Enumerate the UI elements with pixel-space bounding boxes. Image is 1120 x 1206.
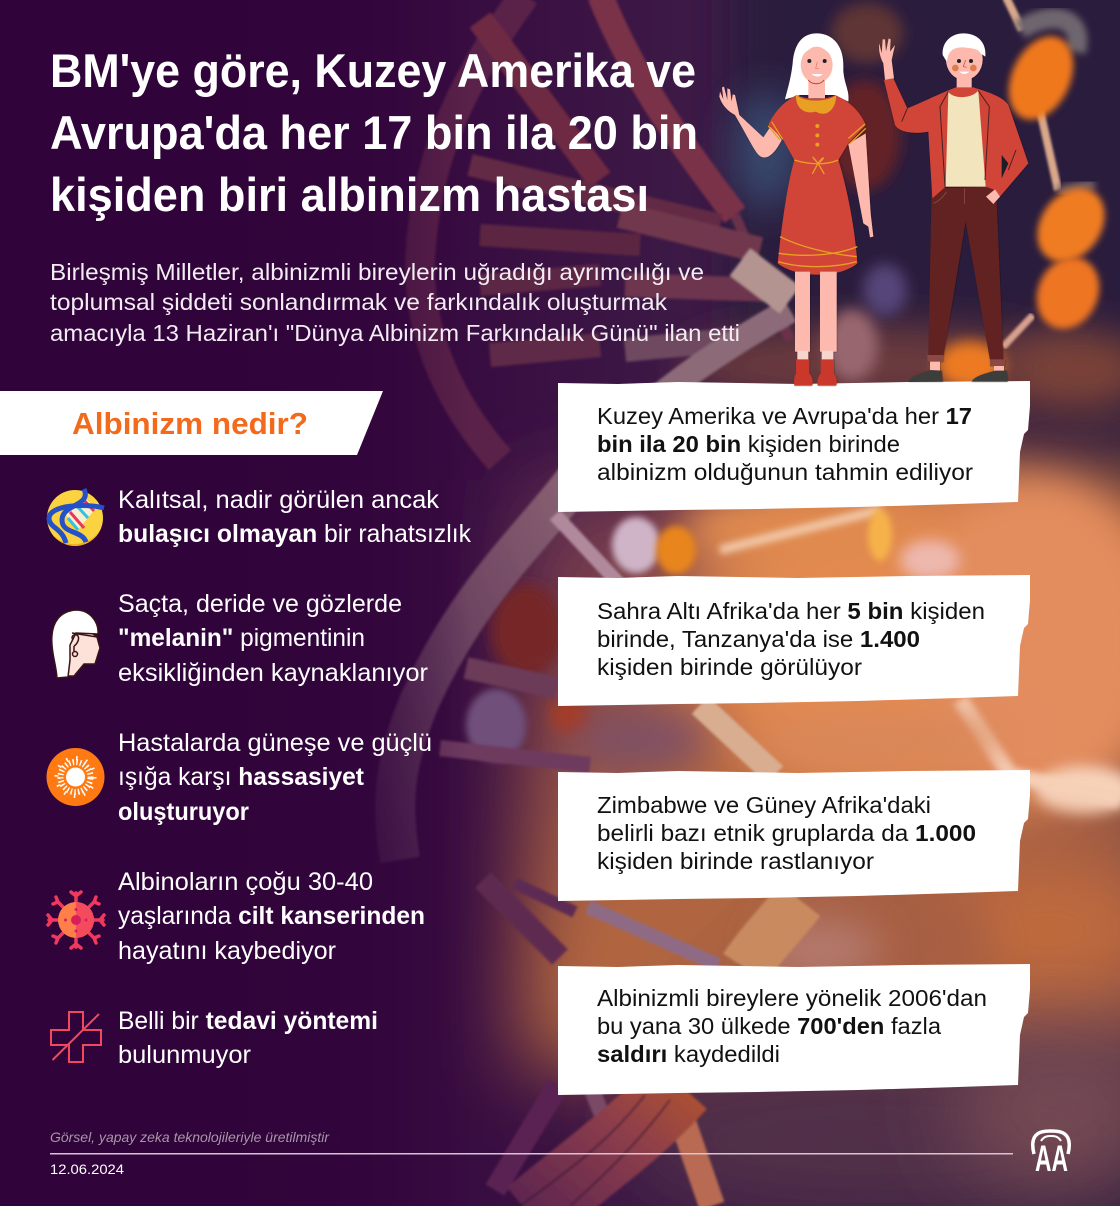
- card: Sub-Saharan Africa: Sahra Altı Afrika'da her 5 bin kişiden: [597, 598, 985, 624]
- list item: skin cancer: yaşlarında cilt kanserinden: [118, 902, 425, 930]
- icon: albino head profile: [52, 610, 100, 678]
- list item: skin cancer: hayatını kaybediyor: [118, 937, 336, 965]
- card: North America and Europe: [558, 381, 1030, 512]
- list item: hereditary: bulaşıcı olmayan bir rahatsızlık: [118, 520, 471, 548]
- list item: melanin: Saçta, deride ve gözlerde: [118, 590, 402, 618]
- icon: virus: [48, 892, 104, 948]
- illustration: albino woman and man: [719, 33, 1028, 386]
- title: kişiden biri albinizm hastası: [50, 168, 649, 221]
- list item: no treatment: [51, 1007, 378, 1069]
- subtitle text: amacıyla 13 Haziran'ı "Dünya Albinizm Farkındalık Günü" ilan etti: [50, 320, 740, 346]
- strands: [395, 0, 800, 1206]
- list item: melanin: [52, 590, 428, 687]
- title: Avrupa'da her 17 bin ila 20 bin: [50, 106, 698, 159]
- card: North America and Europe: bin ila 20 bin kişiden birinde: [597, 431, 900, 457]
- woman: [719, 33, 873, 386]
- subtitle text: toplumsal şiddeti sonlandırmak ve farkındalık oluşturmak: [50, 289, 668, 315]
- footer note: Görsel, yapay zeka teknolojileriyle üretilmiştir: [50, 1129, 330, 1145]
- list item: sun sensitivity: ışığa karşı hassasiyet: [118, 763, 365, 791]
- list item: no treatment: Belli bir tedavi yöntemi: [118, 1007, 378, 1035]
- card: Zimbabwe and South Africa: kişiden birinde rastlanıyor: [597, 848, 874, 874]
- subtitle text: [50, 259, 740, 346]
- card: attacks: Albinizmli bireylere yönelik 2006'dan: [597, 985, 987, 1011]
- icon: sun: [46, 748, 104, 806]
- card: attacks: [558, 964, 1030, 1095]
- card: Sub-Saharan Africa: [558, 575, 1030, 706]
- logo: AA: AA: [1035, 1138, 1068, 1179]
- man: [879, 33, 1028, 382]
- list item: hereditary: [47, 486, 471, 548]
- title: [50, 44, 698, 221]
- card: Zimbabwe and South Africa: Zimbabwe ve Güney Afrika'daki: [597, 792, 931, 818]
- heading banner: Albinizm nedir?: Albinizm nedir?: [72, 406, 308, 441]
- list item: sun sensitivity: [46, 729, 432, 826]
- list item: hereditary: Kalıtsal, nadir görülen ancak: [118, 486, 440, 514]
- card: attacks: saldırı kaydedildi: [597, 1041, 780, 1067]
- list item: sun sensitivity: Hastalarda güneşe ve güçlü: [118, 729, 432, 757]
- card: Sub-Saharan Africa: kişiden birinde görülüyor: [597, 654, 862, 680]
- card: North America and Europe: albinizm olduğunun tahmin ediliyor: [597, 459, 973, 485]
- subtitle text: Birleşmiş Milletler, albinizmli bireylerin uğradığı ayrımcılığı ve: [50, 259, 704, 285]
- card: Sub-Saharan Africa: birinde, Tanzanya'da ise 1.400: [597, 626, 920, 652]
- list item: sun sensitivity: oluşturuyor: [118, 798, 249, 826]
- icon: DNA: [47, 489, 104, 546]
- card: Zimbabwe and South Africa: [558, 770, 1030, 901]
- list item: skin cancer: [48, 868, 425, 965]
- heading banner: Albinizm nedir?: [0, 391, 383, 455]
- list item: melanin: eksikliğinden kaynaklanıyor: [118, 659, 428, 687]
- logo: AA: [1033, 1131, 1069, 1179]
- card: North America and Europe: Kuzey Amerika ve Avrupa'da her 17: [597, 403, 972, 429]
- footer rule: [50, 1153, 1013, 1154]
- list item: no treatment: bulunmuyor: [118, 1041, 251, 1069]
- icon: crossed-out medical cross: [51, 1012, 101, 1062]
- footer date: 12.06.2024: [50, 1161, 124, 1177]
- top right bokeh: [730, 0, 1120, 370]
- card: attacks: bu yana 30 ülkede 700'den fazla: [597, 1013, 942, 1039]
- list item: melanin: "melanin" pigmentinin: [118, 624, 365, 652]
- card: Zimbabwe and South Africa: belirli bazı etnik gruplarda da 1.000: [597, 820, 976, 846]
- list item: skin cancer: Albinoların çoğu 30-40: [118, 868, 373, 896]
- title: BM'ye göre, Kuzey Amerika ve: [50, 44, 696, 97]
